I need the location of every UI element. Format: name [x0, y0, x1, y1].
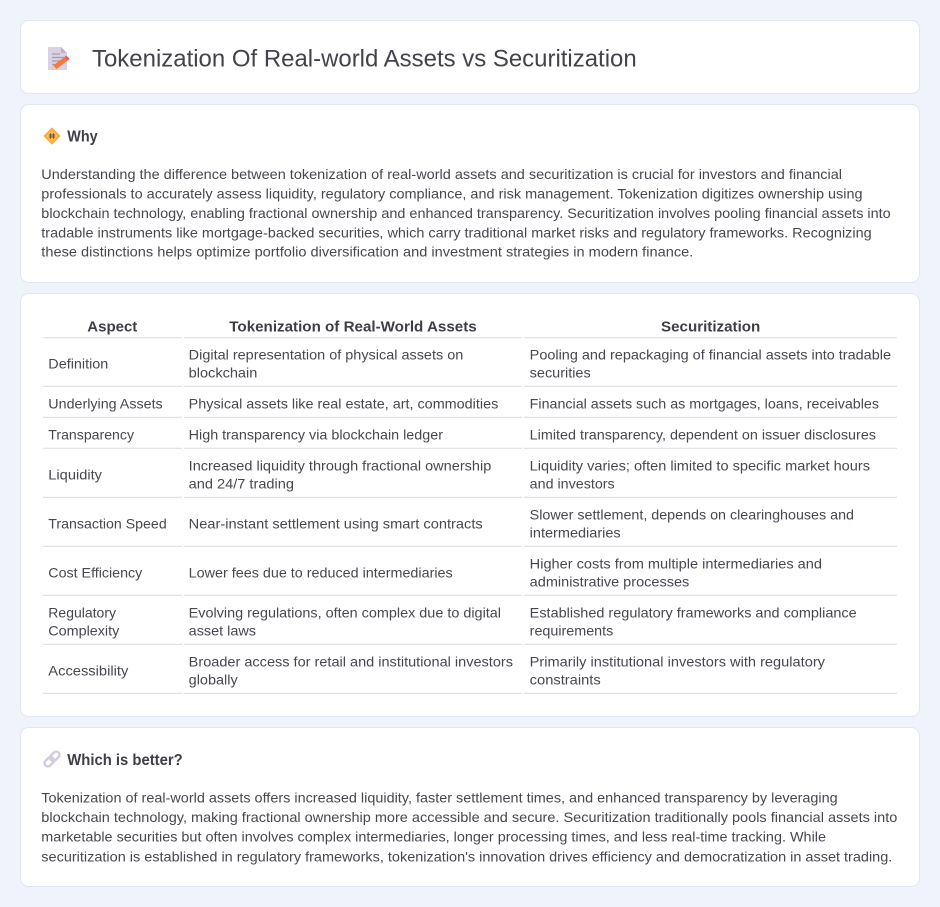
row: accessibility: Accessibility [48, 662, 128, 678]
row: regulatory complexity: Established regulatory frameworks and compliance [530, 604, 857, 620]
row: regulatory complexity [48, 604, 857, 638]
table header row: Tokenization of Real-World Assets [229, 319, 477, 335]
icon: orange diamond sign [44, 128, 60, 144]
row: transaction speed: Slower settlement, depends on clearinghouses and [530, 506, 854, 522]
row: regulatory complexity: Complexity [48, 622, 119, 638]
heading: which is better: Which is better? [67, 752, 183, 769]
row: transaction speed: intermediaries [530, 524, 621, 540]
row: transparency: Limited transparency, dependent on issuer disclosures [530, 426, 876, 442]
row: transparency: Transparency [48, 426, 134, 442]
row: transparency [48, 426, 876, 442]
row: cost efficiency [48, 555, 822, 589]
text block: why paragraph: tradable instruments like mortgage-backed securities, which carry traditional market risks and regulatory frameworks. Recognizing [41, 224, 872, 240]
row: liquidity [48, 457, 870, 491]
row: accessibility: Broader access for retail and institutional investors [189, 653, 513, 669]
panel: comparison table [20, 294, 920, 716]
title: Tokenization Of Real-world Assets vs Securitization [92, 46, 637, 73]
table header row: Securitization [661, 319, 760, 335]
row: liquidity: and 24/7 trading [189, 475, 294, 491]
text block: why paragraph: blockchain technology, enabling fractional ownership and enhanced transparency. Securitization involves pooling financial assets into [41, 205, 891, 221]
row: liquidity: Liquidity [48, 466, 102, 482]
row: cost efficiency: Cost Efficiency [48, 564, 142, 580]
row: underlying assets: Underlying Assets [48, 395, 163, 411]
row: accessibility: globally [189, 671, 238, 687]
row: transaction speed: Transaction Speed [48, 515, 167, 531]
row: liquidity: Increased liquidity through fractional ownership [189, 457, 492, 473]
panel: why [20, 104, 920, 282]
icon: document with pencil [48, 47, 70, 70]
row: accessibility: constraints [530, 671, 601, 687]
text block: which is better paragraph [41, 789, 898, 864]
row: definition: Definition [48, 355, 108, 371]
row: definition [48, 346, 891, 380]
row: liquidity: Liquidity varies; often limited to specific market hours [530, 457, 870, 473]
row: underlying assets [48, 395, 879, 411]
row: regulatory complexity: requirements [530, 622, 613, 638]
row: underlying assets: Financial assets such as mortgages, loans, receivables [530, 395, 879, 411]
row: accessibility: Primarily institutional investors with regulatory [530, 653, 825, 669]
text block: which is better paragraph: marketable securities but often involves complex intermediaries, longer processing times, and less real-time tracking. While [41, 828, 826, 844]
row: definition: blockchain [189, 364, 257, 380]
row: underlying assets: Physical assets like real estate, art, commodities [189, 395, 498, 411]
row: cost efficiency: administrative processes [530, 573, 689, 589]
row: transaction speed: Near-instant settlement using smart contracts [189, 515, 483, 531]
row: transaction speed [48, 506, 854, 540]
panel: title card [20, 20, 920, 94]
text block: which is better paragraph: Tokenization of real-world assets offers increased liquidity, faster settlement times, and enhanced transparency by leveraging [41, 789, 838, 805]
text block: which is better paragraph: blockchain technology, making fractional ownership more accessible and secure. Securitization traditionally pools financial assets into [41, 809, 898, 825]
row: regulatory complexity: Regulatory [48, 604, 116, 620]
heading: why: Why [67, 129, 98, 146]
row: regulatory complexity: Evolving regulations, often complex due to digital [189, 604, 501, 620]
row: liquidity: and investors [530, 475, 615, 491]
row: definition: Digital representation of physical assets on [189, 346, 463, 362]
row: transparency: High transparency via blockchain ledger [189, 426, 443, 442]
icon: chain link [43, 750, 61, 768]
text block: why paragraph: Understanding the difference between tokenization of real-world assets and securitization is crucial for investors and financial [41, 166, 842, 182]
text block: why paragraph [41, 166, 891, 260]
table header row: Aspect [87, 319, 137, 335]
row: definition: securities [530, 364, 591, 380]
panel: which is better [20, 728, 920, 886]
text block: why paragraph: professionals to accurately assess liquidity, regulatory compliance, and risk management. Tokenization digitizes ownership using [41, 185, 863, 201]
row: cost efficiency: Higher costs from multiple intermediaries and [530, 555, 822, 571]
row: regulatory complexity: asset laws [189, 622, 256, 638]
text block: which is better paragraph: securitization is established in regulatory frameworks, tokenization's innovation drives efficiency and democratization in asset trading. [41, 848, 892, 864]
row: accessibility [48, 653, 825, 687]
row: cost efficiency: Lower fees due to reduced intermediaries [189, 564, 453, 580]
table header row [87, 319, 760, 335]
text block: why paragraph: these distinctions helps optimize portfolio diversification and investment strategies in modern finance. [41, 244, 693, 260]
row: definition: Pooling and repackaging of financial assets into tradable [530, 346, 891, 362]
